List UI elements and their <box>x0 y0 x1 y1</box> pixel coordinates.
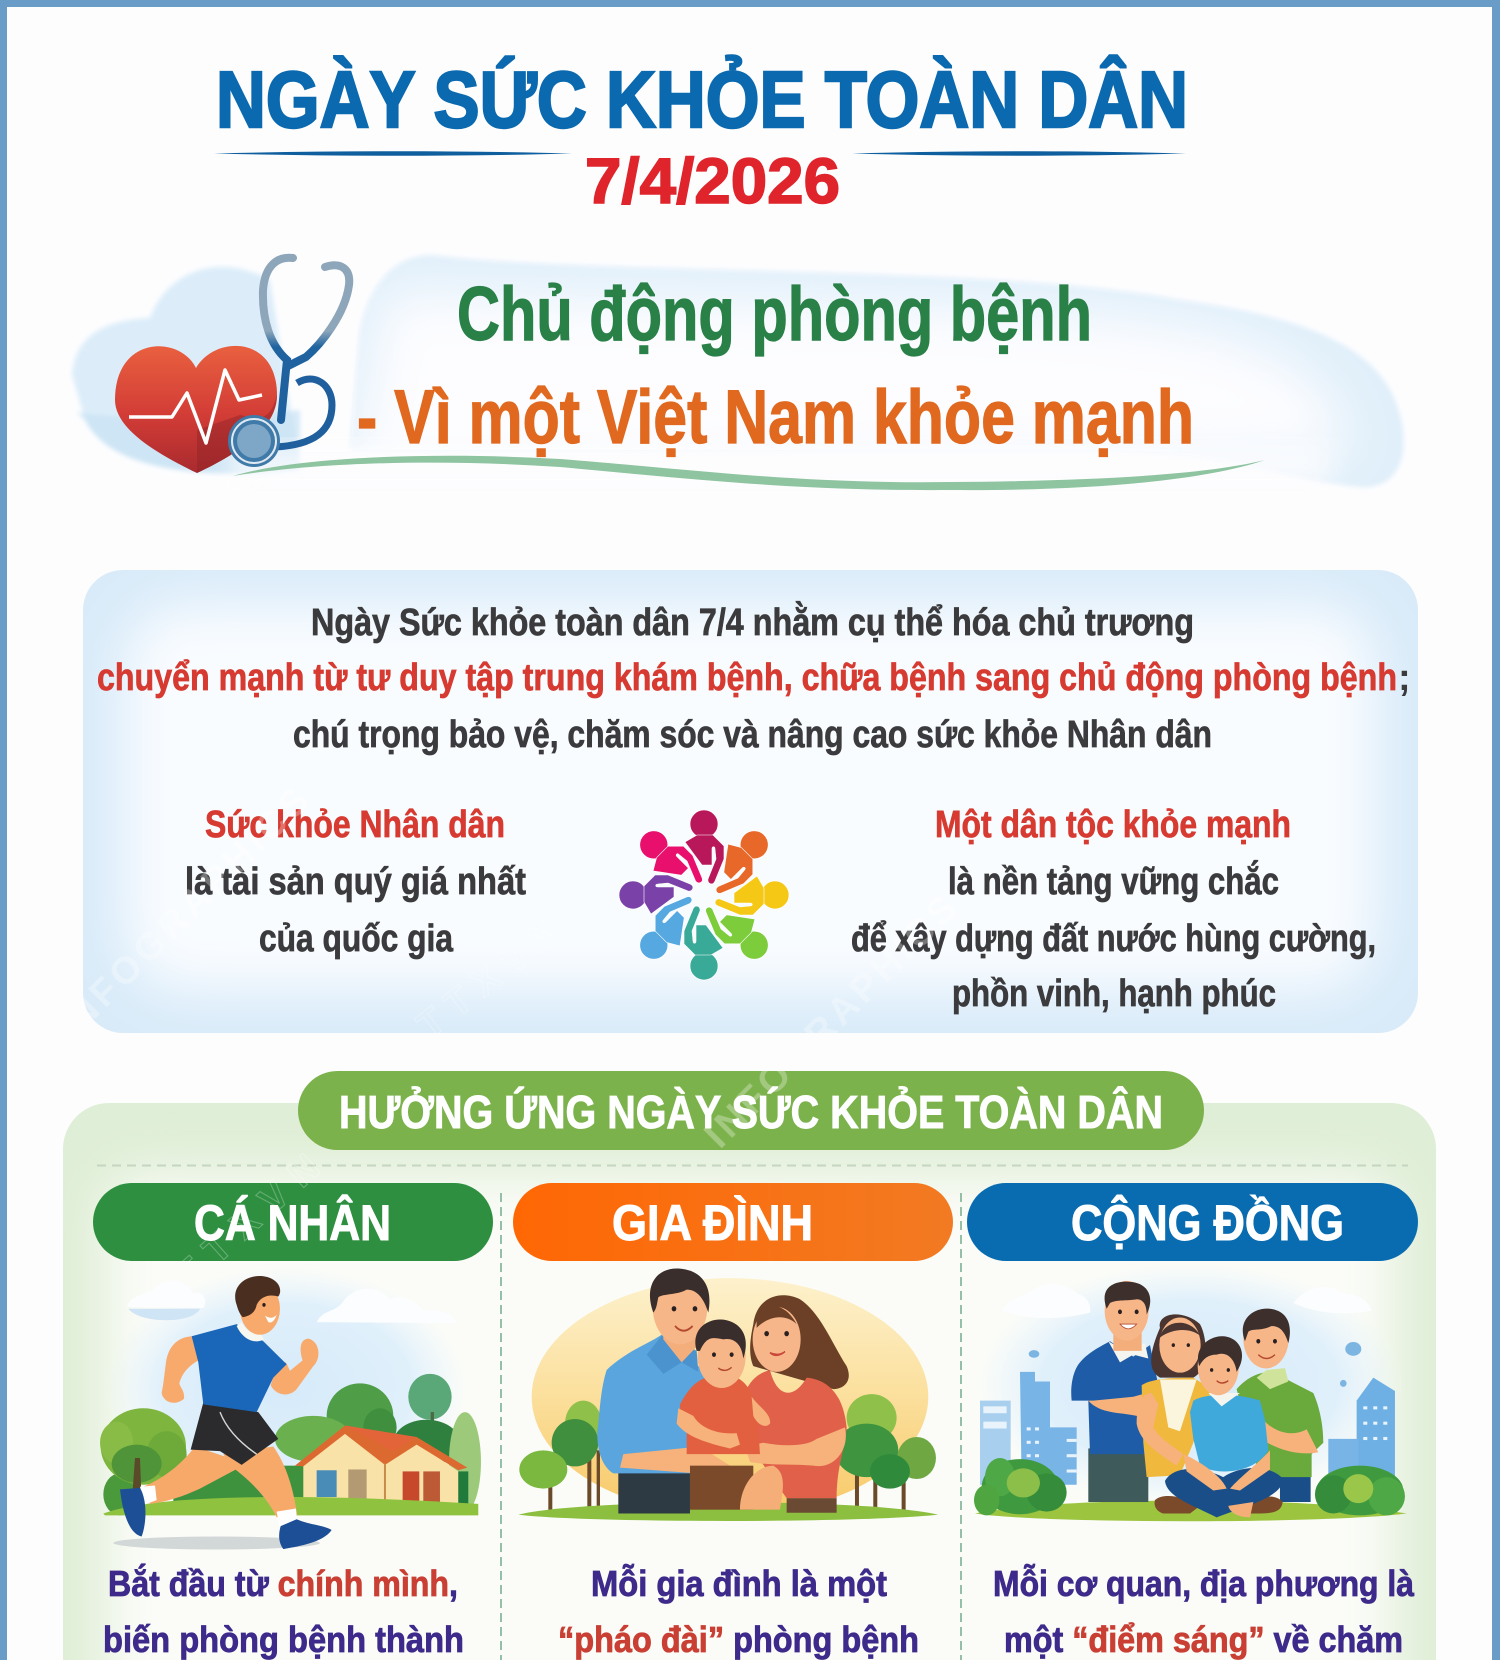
title rule right <box>852 151 1186 156</box>
panel: response section background <box>63 1103 1436 1660</box>
illustration: community group <box>974 1263 1407 1521</box>
watermark <box>49 778 967 1297</box>
right statement: phồn vinh, hạnh phúc <box>952 973 1276 1015</box>
left statement: Sức khỏe Nhân dân <box>205 804 505 846</box>
heading: community <box>967 1183 1418 1261</box>
heading: community: CỘNG ĐỒNG <box>1071 1194 1344 1251</box>
right statement: là nền tảng vững chắc <box>948 859 1279 903</box>
heading: individual <box>93 1183 493 1261</box>
watermark: INFOGRAPHICS <box>697 886 967 1156</box>
caption: individual <box>103 1562 464 1660</box>
watermark: TTXVN <box>410 909 570 1047</box>
banner line 1: Chủ động phòng bệnh <box>457 272 1092 357</box>
caption: family: Mỗi gia đình là một <box>591 1563 887 1604</box>
left statement: của quốc gia <box>259 918 454 960</box>
icon: heart with stethoscope <box>115 258 349 473</box>
watermark: INFOGRAPHICS <box>49 778 319 1048</box>
section heading pill: HƯỞNG ỨNG NGÀY SỨC KHỎE TOÀN DÂN <box>339 1086 1163 1138</box>
left statement: là tài sản quý giá nhất <box>185 861 526 903</box>
icon: circle of people <box>619 810 789 980</box>
illustration: family <box>518 1268 938 1521</box>
right statement: Một dân tộc khỏe mạnh <box>935 804 1291 846</box>
right statement: để xây dựng đất nước hùng cường, <box>851 918 1376 960</box>
intro statement: Ngày Sức khỏe toàn dân 7/4 nhằm cụ thể hóa chủ trương <box>311 600 1194 644</box>
panel: intro background <box>83 570 1418 1033</box>
caption: individual: Bắt đầu từ chính mình, <box>108 1562 458 1604</box>
caption: individual: biến phòng bệnh thành <box>103 1619 464 1660</box>
watermark: TTXVN <box>168 1145 330 1297</box>
heading: individual: CÁ NHÂN <box>194 1195 391 1251</box>
caption: community: một “điểm sáng” về chăm <box>1004 1619 1403 1660</box>
caption: family: “pháo đài” phòng bệnh <box>558 1619 919 1660</box>
illustration: runner and house <box>100 1267 481 1549</box>
heading: family: GIA ĐÌNH <box>612 1195 813 1251</box>
right statement <box>851 804 1376 1015</box>
title: NGÀY SỨC KHỎE TOÀN DÂN <box>216 55 1188 144</box>
intro statement: chú trọng bảo vệ, chăm sóc và nâng cao sức khỏe Nhân dân <box>293 714 1212 756</box>
caption: community <box>993 1563 1415 1660</box>
intro statement <box>97 600 1411 756</box>
caption: community: Mỗi cơ quan, địa phương là <box>993 1563 1415 1604</box>
caption: family <box>558 1563 919 1660</box>
banner cloud <box>72 255 1404 490</box>
green swoosh <box>233 456 1265 490</box>
title rule left <box>214 151 572 156</box>
banner line 2: - Vì một Việt Nam khỏe mạnh <box>357 375 1194 460</box>
heading: family <box>513 1183 953 1261</box>
intro statement: ; <box>1398 657 1411 699</box>
date: 7/4/2026 <box>585 145 840 217</box>
section heading pill <box>298 1071 1204 1150</box>
left statement <box>185 804 526 960</box>
